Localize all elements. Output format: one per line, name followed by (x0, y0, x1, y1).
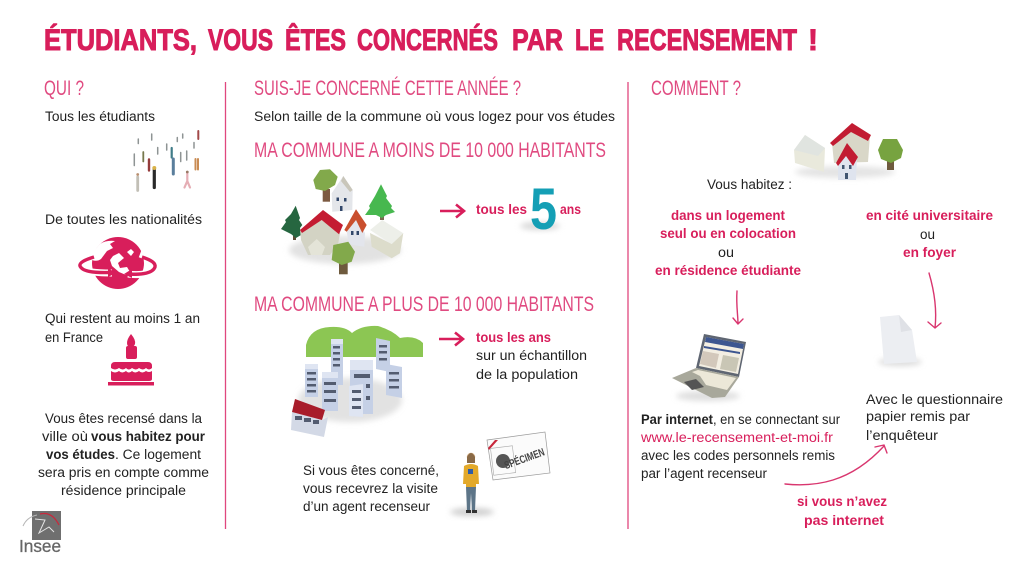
text: questionnaire papier: papier remis par (866, 409, 971, 424)
text: cité universitaire ou foyer: en foyer (903, 245, 957, 260)
heading: moins de 10 000 habitants: MA COMMUNE A MOINS DE 10 000 HABITANTS (254, 139, 606, 162)
text: cité universitaire ou foyer (866, 208, 993, 260)
text: par internet: Par internet (641, 412, 714, 427)
text: questionnaire papier (866, 392, 1003, 443)
illustration: specimen form: SPÉCIMEN (502, 445, 546, 472)
panel: qui (38, 77, 209, 498)
text: si vous n'avez pas internet: si vous n’avez (797, 494, 887, 509)
title: ÉTUDIANTS, (44, 23, 197, 57)
panel: suis-je concerné (254, 77, 615, 516)
illustration: village (281, 169, 403, 274)
illustration: city (291, 326, 423, 437)
text: vous habitez: Vous habitez : (707, 177, 792, 192)
text: tous les ans (476, 330, 587, 382)
text: par internet: avec les codes personnels remis (641, 448, 835, 463)
arrow: tous les 5 ans (440, 204, 464, 218)
text: tous les ans: sur un échantillon (476, 348, 587, 363)
text: cité universitaire ou foyer: ou (920, 227, 935, 242)
heading: plus de 10 000 habitants: MA COMMUNE A PLUS DE 10 000 HABITANTS (254, 293, 594, 316)
title: PAR (512, 24, 563, 57)
text: si vous n'avez pas internet: pas internet (804, 513, 885, 528)
text: par internet: , en se connectant sur (713, 412, 841, 427)
text: agent recenseur: d’un agent recenseur (303, 499, 431, 514)
heading: comment: COMMENT ? (651, 77, 741, 100)
text: résidence principale: résidence principale (61, 483, 186, 498)
text: résidence principale (38, 411, 209, 498)
title (44, 23, 818, 57)
text: logement ou résidence: ou (718, 245, 734, 260)
text: si vous n'avez pas internet (797, 494, 887, 528)
text: résidence principale: ville où (42, 429, 88, 444)
text: logement ou résidence: seul ou en colocation (660, 226, 796, 241)
label: tous les 5 ans: ans (560, 202, 581, 217)
text: questionnaire papier: Avec le questionnaire (866, 392, 1003, 407)
heading: qui: QUI ? (44, 77, 84, 100)
text: logement ou résidence: dans un logement (671, 208, 786, 223)
text: qui restent au moins 1 an (45, 311, 200, 345)
text: qui restent au moins 1 an: en France (45, 330, 103, 345)
text: agent recenseur (303, 463, 439, 514)
text: questionnaire papier: l’enquêteur (866, 428, 939, 443)
arrow: to paper (928, 273, 941, 328)
label: tous les 5 ans: 5 (530, 177, 557, 242)
text: résidence principale: Vous êtes recensé dans la (45, 411, 203, 426)
text: logement ou résidence: en résidence étudiante (655, 263, 801, 278)
label: tous les 5 ans: tous les (476, 202, 527, 217)
title: VOUS (208, 24, 273, 57)
text: tous les étudiants: Tous les étudiants (45, 109, 155, 124)
title: ÊTES (285, 23, 346, 57)
text: résidence principale: vos études (46, 447, 115, 462)
text: tous les ans: de la population (476, 367, 578, 382)
illustration: paper (878, 315, 922, 366)
arrow: to laptop (733, 291, 743, 324)
text: cité universitaire ou foyer: en cité universitaire (866, 208, 993, 223)
text: par internet: www.le-recensement-et-moi.fr (640, 430, 834, 445)
icon: crowd of people (134, 131, 198, 190)
illustration: agent recenseur (450, 453, 494, 516)
text: résidence principale: sera pris en compte comme (38, 465, 209, 480)
illustration: laptop (672, 334, 746, 401)
panel: comment (640, 77, 1003, 528)
text: de toutes les nationalités: De toutes les nationalités (45, 212, 202, 227)
icon: birthday cake (108, 334, 154, 386)
title: RECENSEMENT (617, 24, 797, 57)
text: par internet (640, 412, 841, 481)
text: selon taille: Selon taille de la commune où vous logez pour vos études (254, 109, 615, 124)
text: logement ou résidence (655, 208, 801, 278)
text: qui restent au moins 1 an: Qui restent au moins 1 an (45, 311, 200, 326)
logo: Insee: Insee (19, 536, 61, 556)
icon: globe (80, 237, 155, 289)
illustration: specimen form (487, 432, 550, 480)
illustration: houses (794, 123, 903, 180)
heading: suis-je concerné: SUIS-JE CONCERNÉ CETTE ANNÉE ? (254, 77, 521, 100)
text: agent recenseur: vous recevrez la visite (303, 481, 438, 496)
text: par internet: par l’agent recenseur (641, 466, 768, 481)
text: résidence principale: . Ce logement (115, 447, 201, 462)
text: agent recenseur: Si vous êtes concerné, (303, 463, 439, 478)
arrow: tous les ans (439, 332, 463, 346)
text: tous les ans: tous les ans (476, 330, 551, 345)
title: CONCERNÉS (357, 23, 498, 57)
title: LE (575, 24, 604, 57)
label: tous les 5 ans (476, 177, 581, 242)
title: ! (808, 24, 818, 57)
logo: Insee (19, 511, 61, 556)
arrow: internet to paper (785, 445, 887, 485)
text: résidence principale: vous habitez pour (91, 429, 206, 444)
